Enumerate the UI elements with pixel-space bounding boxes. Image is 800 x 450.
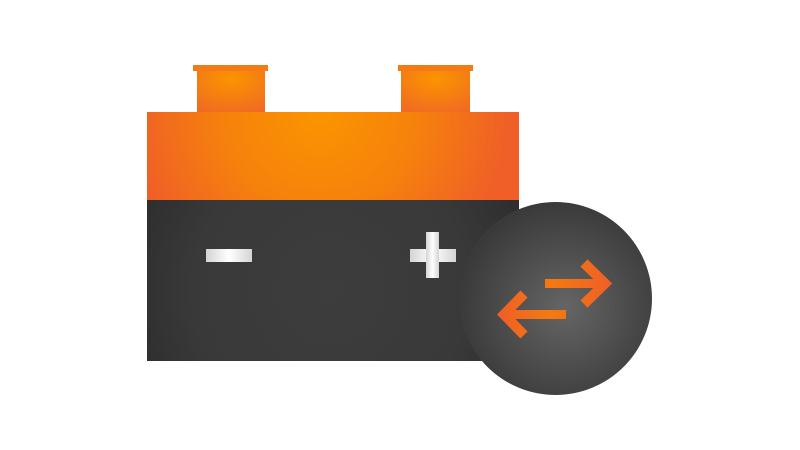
terminal: left <box>193 65 268 112</box>
battery body dark <box>147 200 519 361</box>
terminal: right <box>398 65 473 112</box>
arrow: left <box>504 294 566 335</box>
swap circle icon <box>459 202 652 395</box>
minus sign <box>206 249 252 262</box>
battery <box>147 65 519 361</box>
battery top orange <box>147 112 519 200</box>
plus sign <box>410 232 456 278</box>
arrow: right <box>545 263 605 304</box>
